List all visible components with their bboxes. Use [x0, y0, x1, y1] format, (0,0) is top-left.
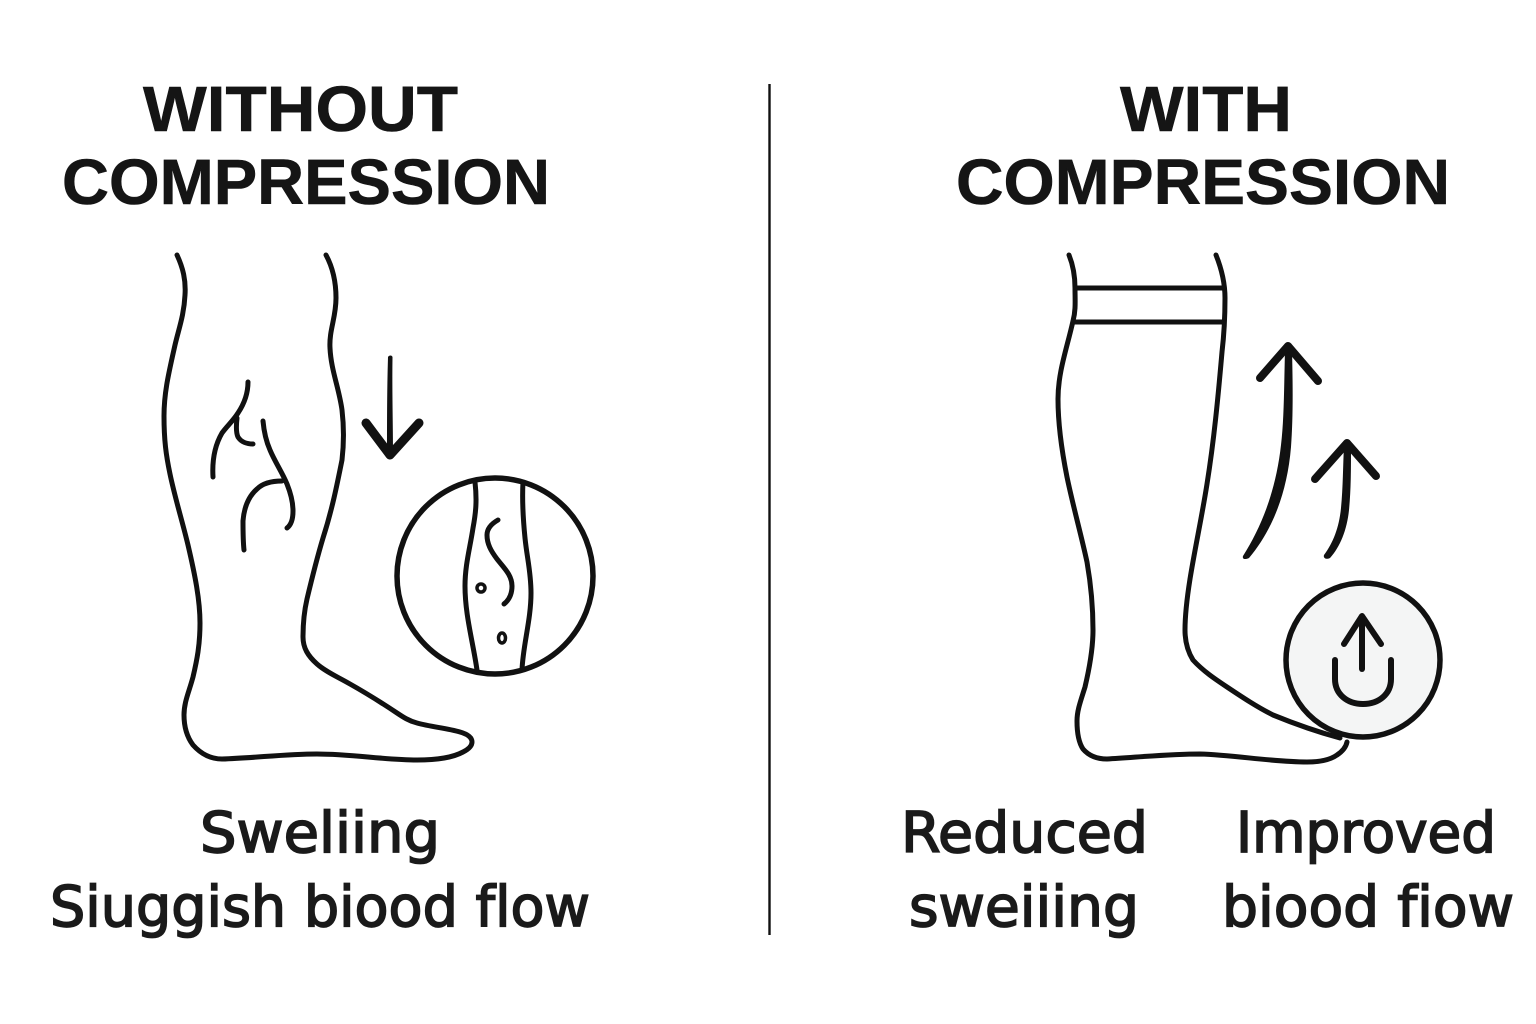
label: reduced swelling: [901, 801, 1148, 940]
arrow: downward flow: [366, 356, 419, 455]
heading: without compression: COMPRESSION: [62, 146, 550, 218]
illustration: leg with compression stocking: [1058, 255, 1347, 762]
label: reduced swelling: Reduced: [901, 801, 1148, 866]
icon: circulation badge: [1286, 583, 1440, 737]
heading: without compression: WITHOUT: [143, 73, 458, 145]
label: reduced swelling: sweiiing: [909, 875, 1139, 940]
heading: without compression: [62, 73, 550, 218]
heading: with compression: [956, 73, 1450, 218]
arrow: small upward flow: [1315, 443, 1376, 559]
label: improved blood flow: Improved: [1236, 801, 1496, 866]
label: swelling: Sweliing: [200, 801, 440, 866]
icon: magnified vein: [397, 478, 593, 674]
label: improved blood flow: biood fiow: [1222, 875, 1514, 940]
icon: varicose veins: [213, 382, 293, 550]
heading: with compression: WITH: [1120, 73, 1292, 145]
arrow: large upward flow: [1243, 346, 1318, 559]
illustration: swollen leg outline: [164, 255, 472, 760]
label: improved blood flow: [1222, 801, 1514, 940]
panel: with compression: [901, 73, 1514, 940]
label: sluggish blood flow: Siuggish biood flow: [50, 875, 590, 940]
panel: without compression: [50, 73, 593, 940]
heading: with compression: COMPRESSION: [956, 146, 1450, 218]
